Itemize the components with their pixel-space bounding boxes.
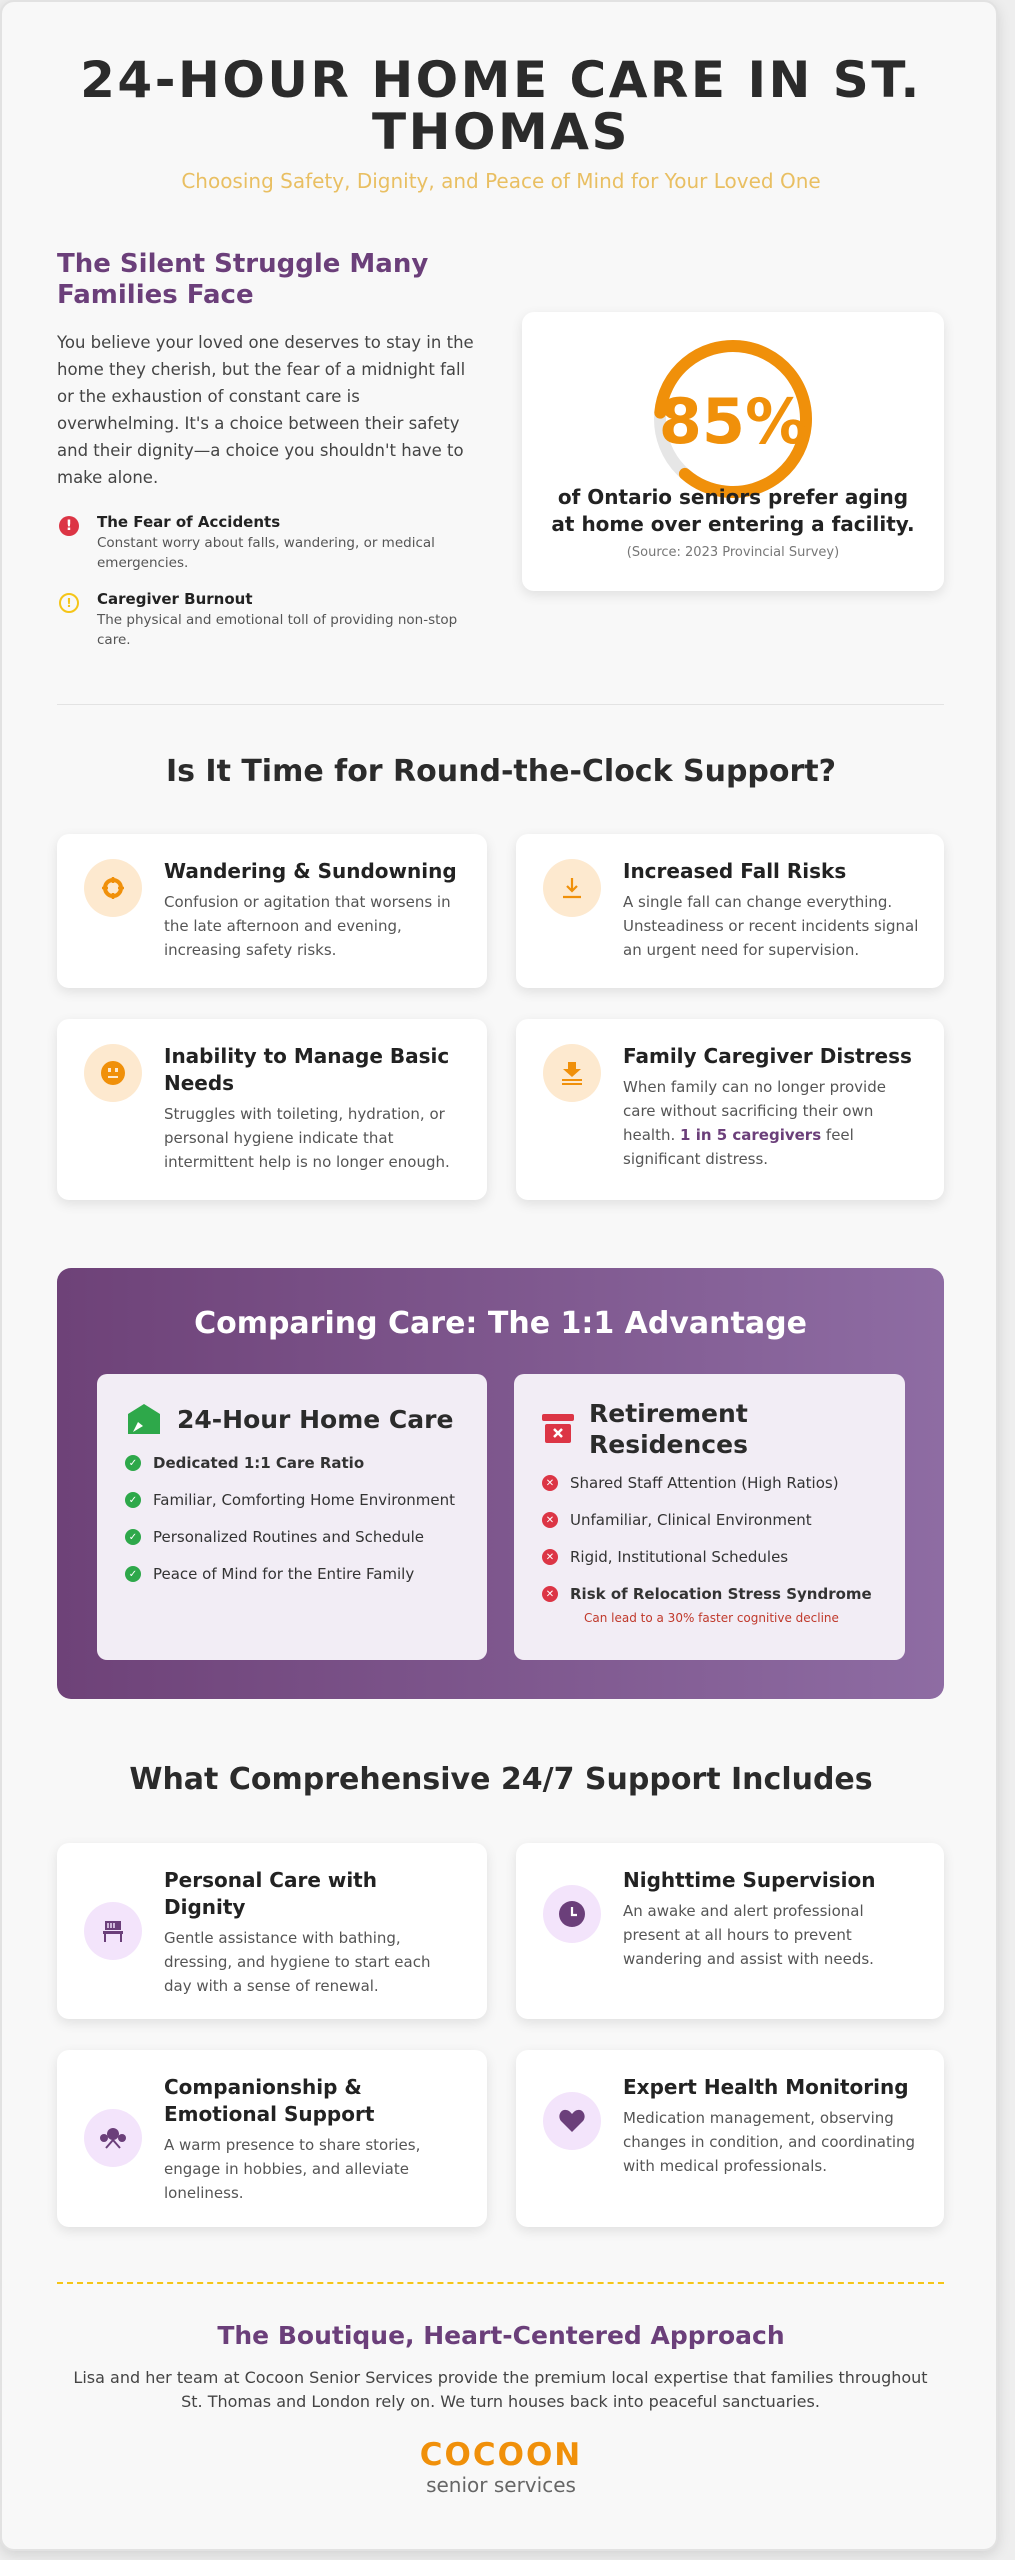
- closing paragraph: [73, 2368, 928, 2411]
- logo: senior services: [426, 2473, 576, 2497]
- icon: target: [84, 859, 142, 917]
- card: falls: Increased Fall Risks: [623, 859, 846, 883]
- list: drawbacks: Risk of Relocation Stress Syndrome: [570, 1585, 872, 1603]
- icon: alert: [59, 516, 79, 536]
- column: retirement residences: [514, 1374, 905, 1660]
- card: health monitoring: [516, 2050, 944, 2227]
- list: benefits: Dedicated 1:1 Care Ratio: [153, 1454, 364, 1472]
- card: companionship: A warm presence to share stories, engage in hobbies, and alleviate loneliness.: [164, 2136, 420, 2202]
- card: nighttime: Nighttime Supervision: [623, 1868, 876, 1892]
- list: drawbacks: Rigid, Institutional Schedules: [570, 1548, 788, 1566]
- card: falls: [516, 834, 944, 988]
- icon: people: [84, 2109, 142, 2167]
- list: benefits: ✓: [129, 1494, 137, 1506]
- concern: caregiver burnout: The physical and emotional toll of providing non‑stop care.: [97, 612, 457, 648]
- list: drawbacks: [542, 1474, 872, 1625]
- icon: download tray: [543, 1044, 601, 1102]
- heading: round-the-clock: Is It Time for Round-the-Clock Support?: [166, 754, 836, 789]
- icon: house: [128, 1404, 160, 1434]
- title: THOMAS: [372, 103, 630, 161]
- icon: bath: [84, 1902, 142, 1960]
- card: nighttime: An awake and alert professional present at all hours to prevent wandering and assist with needs.: [623, 1902, 874, 1968]
- heading: support includes: What Comprehensive 24/7 Support Includes: [129, 1762, 873, 1797]
- title: 24-HOUR HOME CARE IN ST.: [80, 51, 922, 109]
- list: drawbacks: ✕: [546, 1478, 554, 1488]
- card: caregiver distress: [516, 1019, 944, 1200]
- list: drawbacks: ✕: [546, 1514, 554, 1526]
- column: home care: [97, 1374, 487, 1660]
- card: health monitoring: Expert Health Monitoring: [623, 2075, 909, 2099]
- list: drawbacks: Unfamiliar, Clinical Environment: [570, 1511, 812, 1529]
- card: nighttime: [516, 1843, 944, 2019]
- card: wandering: [57, 834, 487, 988]
- source: (Source: 2023 Provincial Survey): [627, 545, 839, 560]
- heading: boutique approach: The Boutique, Heart-Centered Approach: [217, 2321, 785, 2350]
- column: home care: 24-Hour Home Care: [177, 1405, 453, 1434]
- stat label: [551, 485, 915, 536]
- stat label: at home over entering a facility.: [551, 512, 915, 536]
- icon: warning: [59, 593, 79, 613]
- icon: face: [84, 1044, 142, 1102]
- closing paragraph: Lisa and her team at Cocoon Senior Services provide the premium local expertise that families throughout: [73, 2368, 928, 2387]
- icon: heart: [543, 2092, 601, 2150]
- title: [80, 51, 922, 161]
- card: caregiver distress: When family can no longer provide care without sacrificing their own health. 1 in 5 caregivers feel significant distress.: [623, 1078, 886, 1168]
- card: personal care: Personal Care with Dignity: [164, 1868, 377, 1919]
- list: drawbacks: Shared Staff Attention (High Ratios): [570, 1474, 839, 1492]
- concern: caregiver burnout: Caregiver Burnout: [97, 590, 252, 608]
- subtitle: Choosing Safety, Dignity, and Peace of Mind for Your Loved One: [181, 169, 821, 193]
- intro paragraph: You believe your loved one deserves to stay in the home they cherish, but the fear of a midnight fall or the exhaustion of constant care is overwhelming. It's a choice between their safety and their dignity—a choice you shouldn't have to make alone.: [57, 333, 474, 487]
- list: benefits: ✓: [129, 1458, 137, 1468]
- icon: warning: !: [66, 596, 72, 610]
- list: drawbacks: ✕: [546, 1588, 554, 1600]
- list: benefits: Familiar, Comforting Home Environment: [153, 1491, 455, 1509]
- card: wandering: Confusion or agitation that worsens in the late afternoon and evening, increasing safety risks.: [164, 893, 451, 959]
- list: drawbacks: Can lead to a 30% faster cognitive decline: [584, 1611, 839, 1625]
- list: benefits: [125, 1454, 455, 1583]
- card: companionship: Companionship & Emotional Support: [164, 2075, 374, 2126]
- card: personal care: Gentle assistance with bathing, dressing, and hygiene to start each day with a sense of renewal.: [164, 1929, 430, 1995]
- card: companionship: [57, 2050, 487, 2227]
- column: retirement residences: Residences: [589, 1430, 748, 1459]
- card: basic needs: Inability to Manage Basic Needs: [164, 1044, 449, 1095]
- logo: [420, 2437, 582, 2497]
- card: falls: A single fall can change everything. Unsteadiness or recent incidents signal an urgent need for supervision.: [623, 893, 918, 959]
- list: benefits: Personalized Routines and Schedule: [153, 1528, 424, 1546]
- concern: fear of accidents: [59, 513, 435, 571]
- icon: box x: [542, 1414, 574, 1443]
- card: basic needs: [57, 1019, 487, 1200]
- stat number: 85%: [659, 385, 807, 458]
- panel: comparing care: [57, 1268, 944, 1699]
- card: basic needs: Struggles with toileting, hydration, or personal hygiene indicate that intermittent help is no longer enough.: [164, 1105, 450, 1171]
- card: caregiver distress: Family Caregiver Distress: [623, 1044, 912, 1068]
- donut chart 85%: [654, 340, 812, 498]
- closing paragraph: St. Thomas and London rely on. We turn houses back into peaceful sanctuaries.: [181, 2392, 820, 2411]
- stat card: [522, 312, 944, 591]
- concern: fear of accidents: The Fear of Accidents: [97, 513, 280, 531]
- icon: alert: !: [66, 518, 72, 534]
- list: benefits: Peace of Mind for the Entire Family: [153, 1565, 414, 1583]
- list: benefits: ✓: [129, 1568, 137, 1580]
- panel heading: Comparing Care: The 1:1 Advantage: [194, 1306, 807, 1341]
- logo: COCOON: [420, 2437, 582, 2473]
- card: personal care: [57, 1843, 487, 2019]
- icon: clock: [543, 1885, 601, 1943]
- icon: fall arrow: [543, 859, 601, 917]
- concern: caregiver burnout: [59, 590, 457, 648]
- list: drawbacks: ✕: [546, 1552, 554, 1562]
- list: benefits: ✓: [129, 1532, 137, 1542]
- card: wandering: Wandering & Sundowning: [164, 859, 457, 883]
- column: retirement residences: Retirement: [589, 1399, 748, 1428]
- concern: fear of accidents: Constant worry about falls, wandering, or medical emergencies.: [97, 535, 435, 571]
- card: health monitoring: Medication management, observing changes in condition, and coordinating with medical professionals.: [623, 2109, 915, 2175]
- stat label: of Ontario seniors prefer aging: [558, 485, 908, 509]
- heading: silent struggle: The Silent Struggle Many Families Face: [57, 249, 428, 310]
